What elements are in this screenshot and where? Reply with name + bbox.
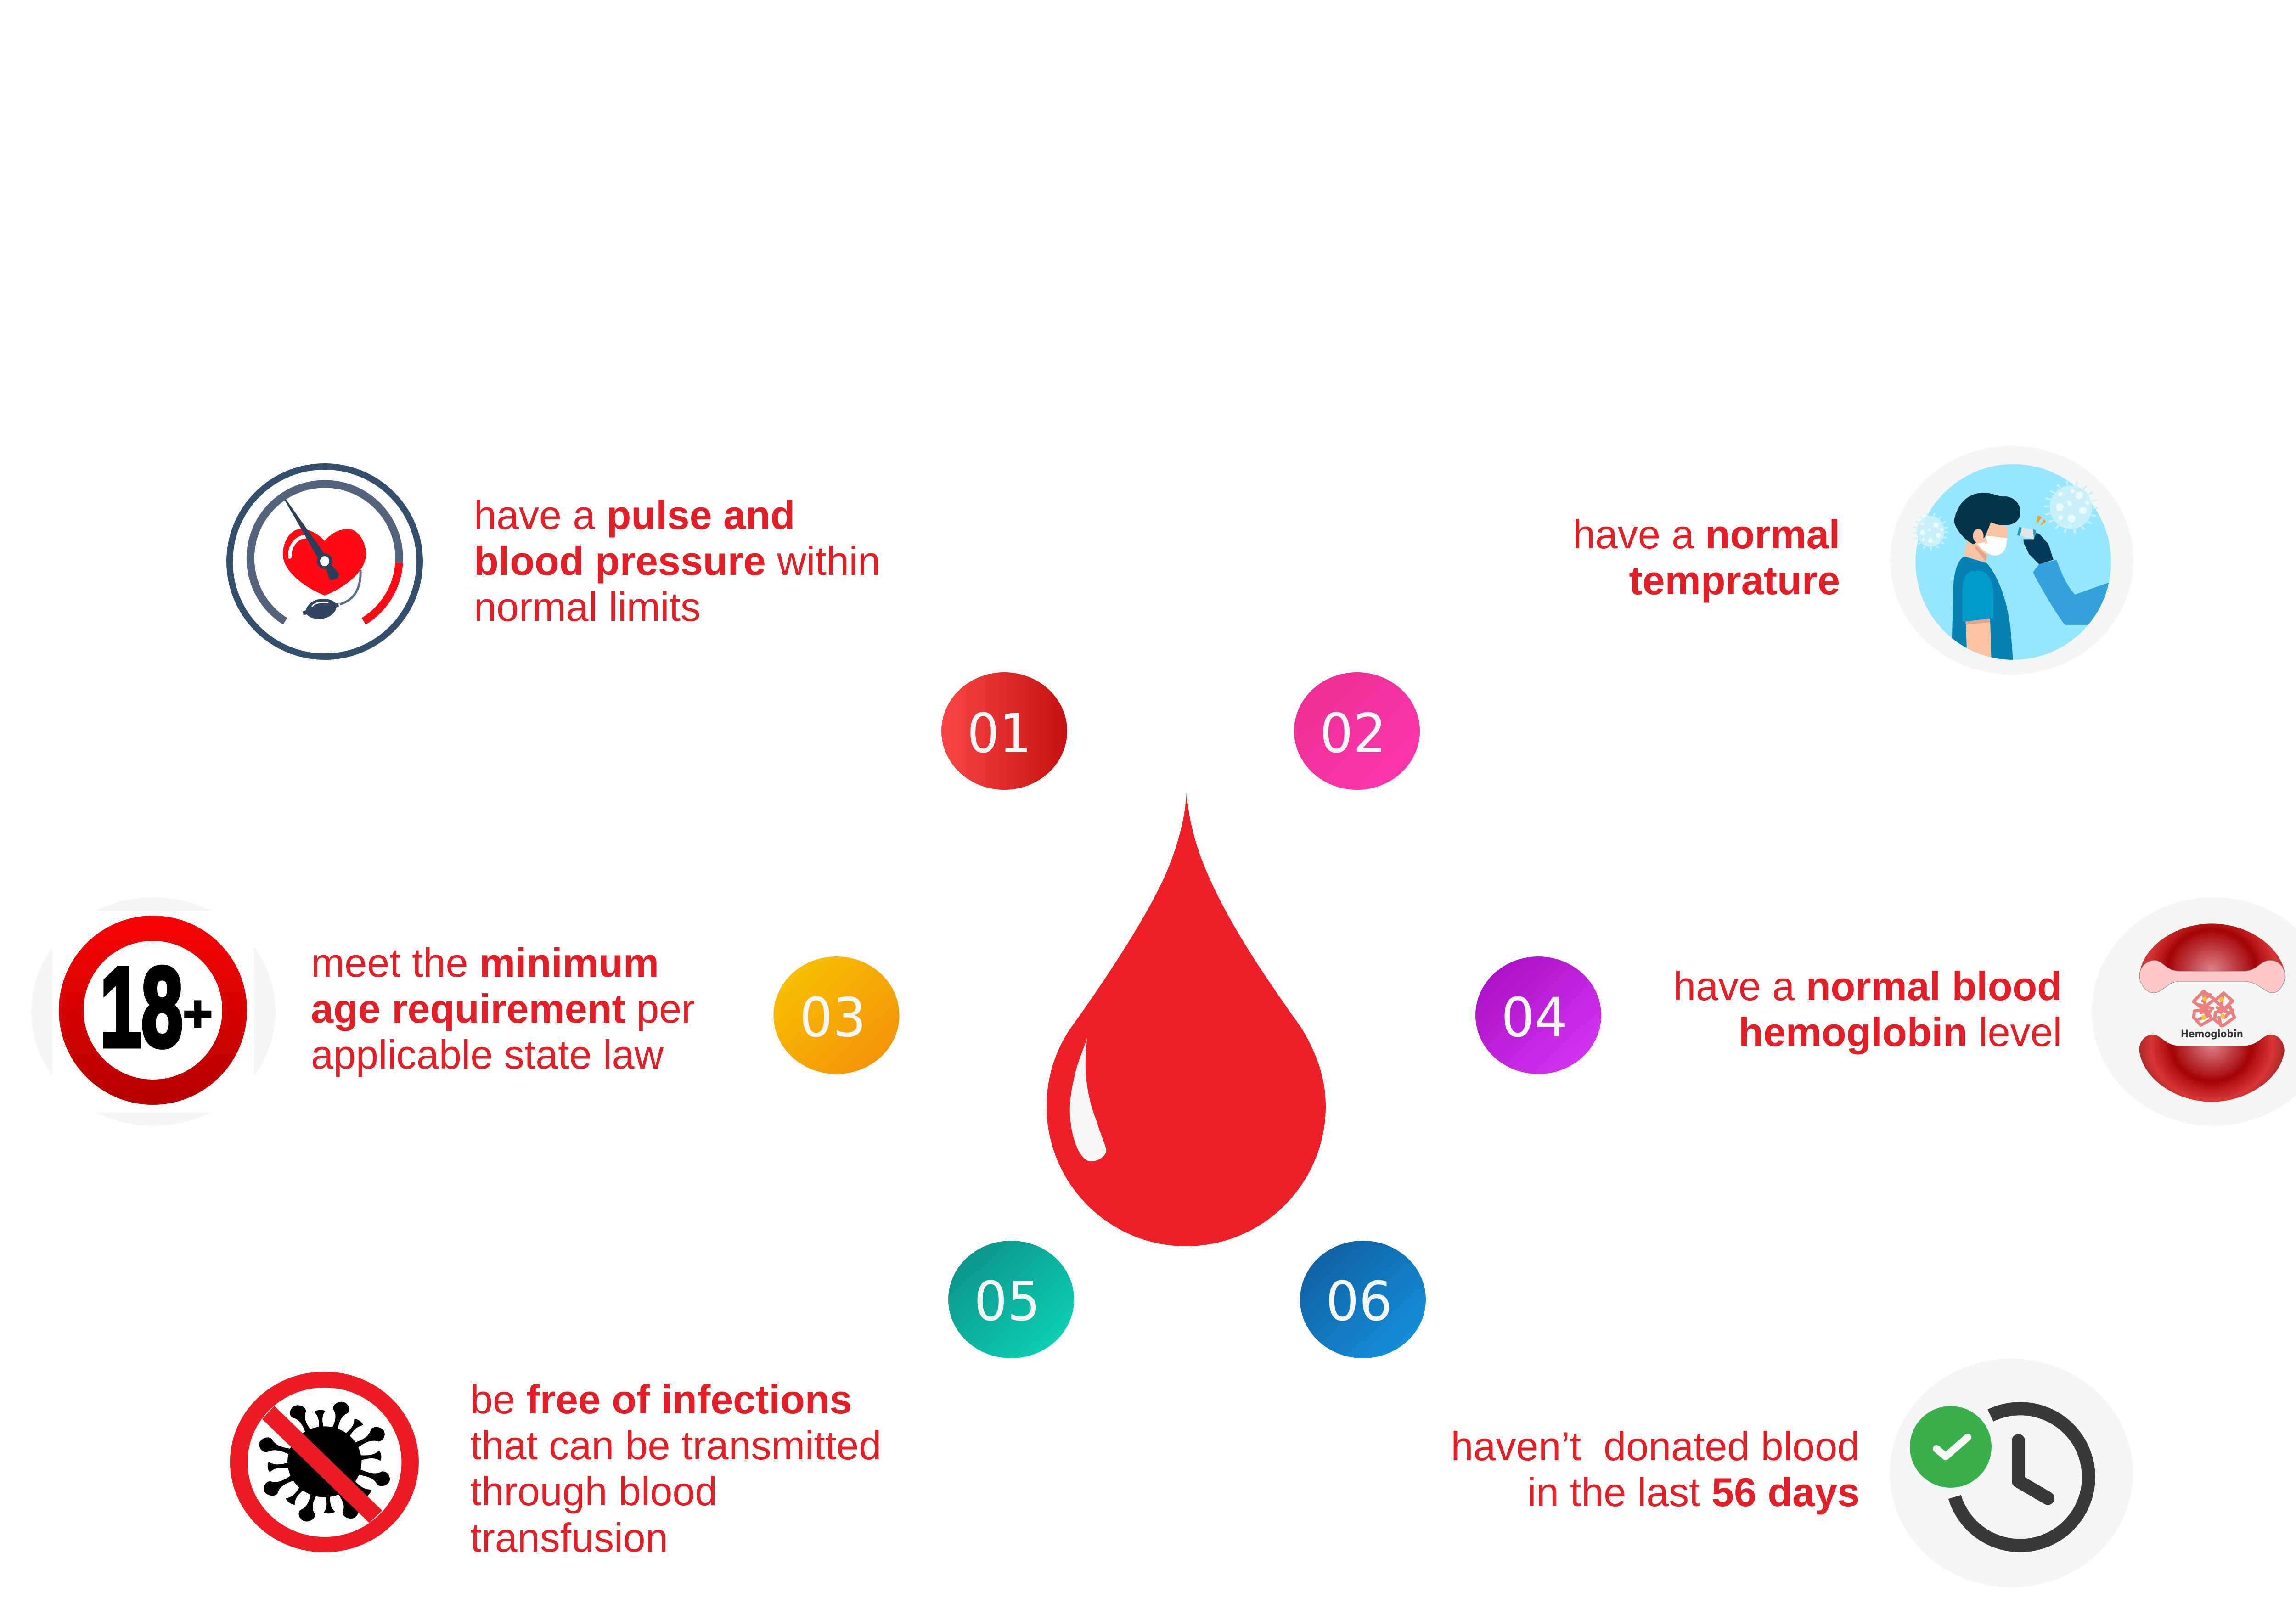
icon: hemoglobin red blood cell: Hemoglobin (2181, 1029, 2243, 1040)
icon: 18+ age sign: 18 (100, 944, 183, 1070)
text: hemoglobin level: have a normal blood (1673, 963, 2062, 1009)
text: free of infections: be free of infections (470, 1377, 852, 1422)
text: donation interval: in the last 56 days (1527, 1469, 1860, 1515)
text: free of infections: through blood (470, 1468, 717, 1514)
icon: 18+ age sign: + (183, 985, 213, 1042)
text: minimum age: age requirement per (311, 986, 695, 1031)
blood drop (1047, 792, 1326, 1246)
text: hemoglobin level (1673, 963, 2062, 1055)
text: donation interval: haven’t donated blood (1451, 1423, 1860, 1469)
text: pulse and blood pressure (474, 492, 880, 630)
text: normal temperature: have a normal (1573, 512, 1840, 557)
number badge 02 (1294, 672, 1420, 790)
text: minimum age: meet the minimum (311, 940, 659, 985)
thermometer and glove (2019, 527, 2036, 539)
icon: 18+ age sign (31, 897, 276, 1126)
virus particles (1914, 483, 2095, 549)
number badge 05 (948, 1241, 1074, 1358)
number badge 02: 02 (1320, 702, 1386, 765)
text: pulse and blood pressure: blood pressure within (474, 538, 880, 584)
number badge 01 (941, 672, 1067, 790)
text: normal temperature (1573, 512, 1840, 603)
number badge 06: 06 (1326, 1270, 1392, 1333)
text: free of infections: transfusion (470, 1515, 668, 1560)
text: free of infections (470, 1377, 881, 1560)
text: pulse and blood pressure: have a pulse and (474, 492, 795, 538)
number badge 05: 05 (974, 1270, 1041, 1333)
text: minimum age: applicable state law (311, 1032, 664, 1077)
text: minimum age (311, 940, 695, 1077)
text: pulse and blood pressure: normal limits (474, 584, 701, 630)
text: donation interval (1451, 1423, 1860, 1515)
number badge 03 (773, 956, 899, 1074)
number badge 04: 04 (1501, 986, 1568, 1049)
number badge 01: 01 (967, 702, 1031, 765)
icon: clock with check mark (1890, 1359, 2133, 1587)
number badge 04 (1475, 956, 1601, 1074)
icon: blood pressure gauge (230, 467, 420, 657)
icon: temperature check (1890, 446, 2133, 675)
icon: no virus sign (230, 1372, 419, 1552)
hemoglobin molecule (2194, 991, 2234, 1026)
text: free of infections: that can be transmitted (470, 1423, 881, 1468)
number badge 03: 03 (799, 986, 866, 1049)
number badge 06 (1300, 1241, 1426, 1358)
text: normal temperature: temprature (1629, 557, 1840, 603)
icon: hemoglobin red blood cell (2092, 897, 2296, 1126)
person (1964, 521, 2007, 562)
text: hemoglobin level: hemoglobin level (1739, 1009, 2062, 1055)
